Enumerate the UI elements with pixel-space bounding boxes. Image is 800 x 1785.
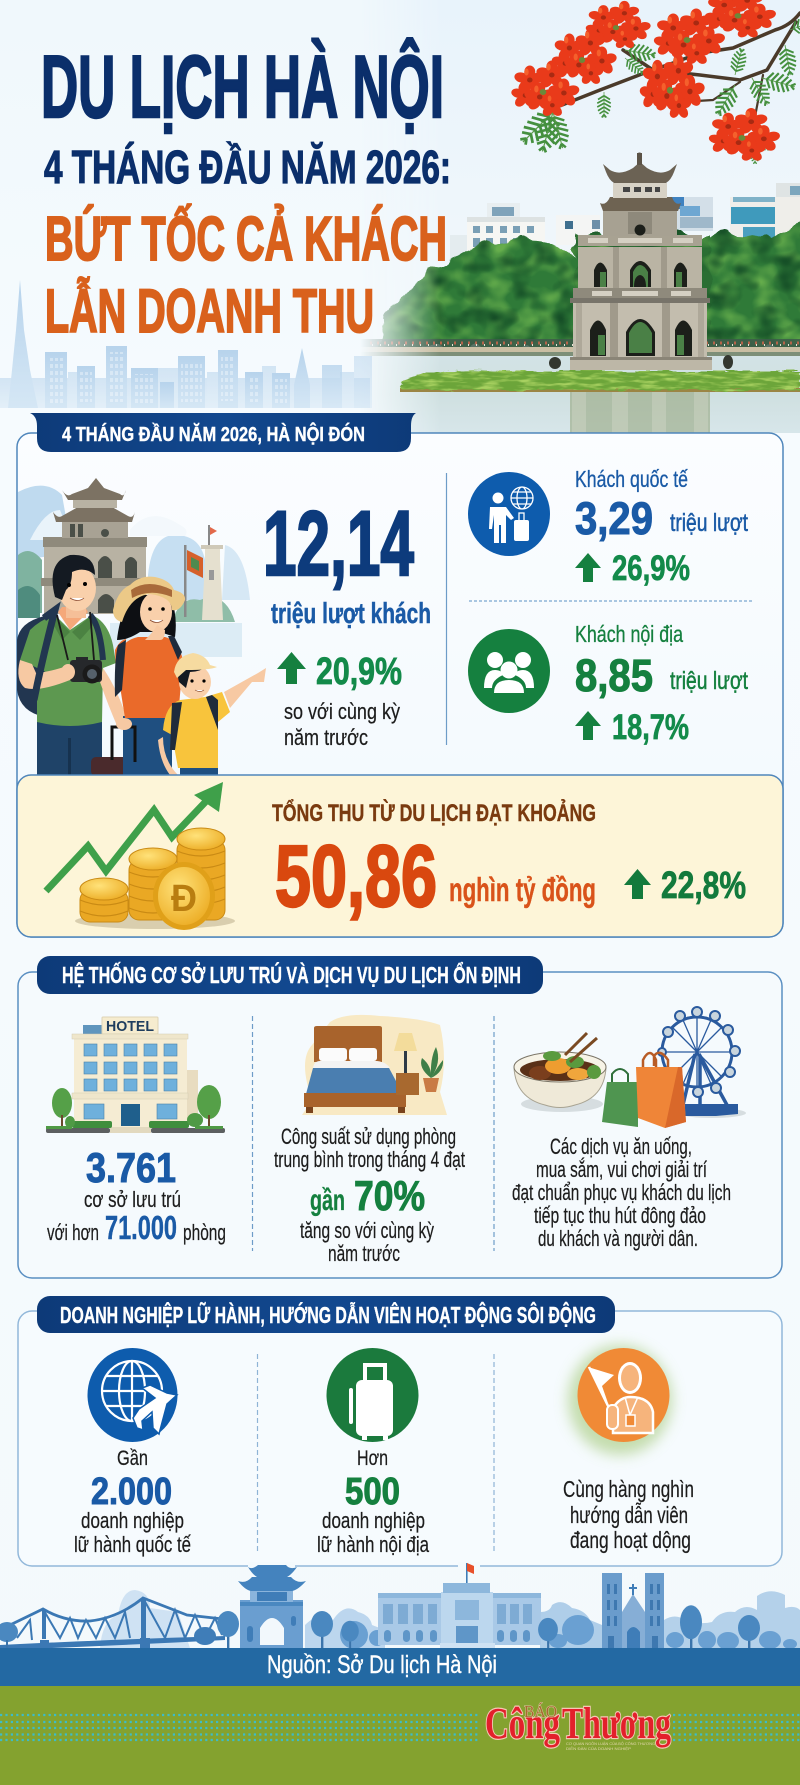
St Joseph cathedral xyxy=(602,1573,664,1648)
Hanoi gate xyxy=(238,1565,306,1648)
lake shore xyxy=(360,339,800,357)
suitcase xyxy=(91,757,154,776)
stat: room occupancy: Công suất sử dụng phòng xyxy=(281,1124,456,1149)
panel: visitors xyxy=(17,433,783,937)
distant tree silhouettes xyxy=(100,1590,800,1650)
panel: tourism revenue xyxy=(17,775,783,937)
Presidential palace xyxy=(378,1563,541,1648)
revenue figure: nghìn tỷ đồng xyxy=(449,871,596,908)
revenue figure: 50,86 xyxy=(275,828,437,925)
logo: Báo Công Thương: Thương xyxy=(562,1699,671,1748)
stat: room occupancy: trung bình trong tháng 4 đạt xyxy=(274,1147,465,1172)
text: services: mua sắm, vui chơi giải trí xyxy=(536,1157,707,1182)
stat: international tour companies: 2.000 xyxy=(91,1471,172,1513)
main number 12,14 million: triệu lượt khách xyxy=(271,598,431,630)
growth 20,9%: so với cùng kỳ xyxy=(284,699,400,724)
left city skyline xyxy=(0,280,372,408)
stat: room occupancy: tăng so với cùng kỳ xyxy=(300,1218,434,1243)
stat: room occupancy: gần xyxy=(310,1184,345,1217)
icon: hotel xyxy=(46,1017,225,1133)
stat: tour guides: Cùng hàng nghìn xyxy=(563,1476,694,1502)
backpack of man xyxy=(17,615,55,717)
stat: international tour companies xyxy=(74,1348,191,1557)
icon: globe and plane xyxy=(88,1348,178,1442)
revenue growth: 22,8% xyxy=(661,865,746,907)
stat: room occupancy: năm trước xyxy=(328,1241,400,1266)
bottom skyline of Hanoi landmarks xyxy=(0,1562,800,1653)
illustration: family of tourists at Hanoi landmarks xyxy=(17,478,266,776)
Long Bien bridge xyxy=(0,1598,239,1650)
title line 4: LẪN DOANH THU xyxy=(45,277,374,345)
icon: suitcase xyxy=(326,1348,418,1442)
title xyxy=(41,37,451,345)
icon: traveller with globe xyxy=(468,472,550,556)
icon: bed xyxy=(302,1015,447,1115)
section heading 2: HỆ THỐNG CƠ SỞ LƯU TRÚ VÀ DỊCH VỤ DU LỊCH ỔN ĐỊNH xyxy=(62,960,521,988)
title line 2: 4 THÁNG ĐẦU NĂM 2026: xyxy=(44,141,451,193)
section heading 1: 4 THÁNG ĐẦU NĂM 2026, HÀ NỘI ĐÓN xyxy=(62,422,365,446)
source bar xyxy=(0,1648,800,1686)
stat: domestic tour companies: lữ hành nội địa xyxy=(317,1532,430,1557)
icon: tour guide xyxy=(578,1348,670,1442)
stat: international tour companies: doanh nghiệp xyxy=(81,1508,184,1533)
stat: domestic tour companies: doanh nghiệp xyxy=(322,1508,425,1533)
logo: Báo Công Thương: BÁO xyxy=(524,1702,557,1721)
stat: tour guides: đang hoạt dộng xyxy=(570,1527,691,1553)
growth 20,9%: 20,9% xyxy=(316,651,402,693)
icon: group of people xyxy=(468,629,550,713)
stat: tour guides: hướng dẫn viên xyxy=(570,1502,688,1528)
reflection of the tower xyxy=(570,392,710,433)
stat: room occupancy: 70% xyxy=(354,1172,425,1219)
icon: hotel: HOTEL xyxy=(106,1018,154,1035)
revenue figure xyxy=(275,828,596,925)
main number 12,14 million: 12,14 xyxy=(263,493,414,595)
stat: domestic tour companies: Hơn xyxy=(357,1447,388,1470)
revenue growth xyxy=(624,865,746,907)
source bar: Nguồn: Sở Du lịch Hà Nội xyxy=(267,1651,497,1679)
stat: domestic tour companies xyxy=(317,1348,430,1557)
background buildings xyxy=(450,183,800,262)
stat: international tour companies: lữ hành quốc tế xyxy=(74,1532,191,1557)
logo: Báo Công Thương xyxy=(485,1699,671,1751)
domestic visitors xyxy=(468,621,748,747)
stat: tour guides xyxy=(563,1345,694,1553)
text: services xyxy=(512,1134,731,1251)
title line 1: DU LỊCH HÀ NỘI xyxy=(41,37,444,136)
trees xyxy=(378,218,800,348)
domestic visitors: Khách nội địa xyxy=(575,621,683,647)
section heading 2 xyxy=(37,956,543,994)
trees row xyxy=(311,1605,760,1653)
stat: international tour companies: Gần xyxy=(117,1447,148,1470)
international visitors: 3,29 xyxy=(575,493,653,544)
logo: Báo Công Thương: DIỄN ĐÀN CỦA DOANH NGHIỆP xyxy=(566,1746,631,1751)
icon: rising chart and coins: Đ xyxy=(171,878,197,920)
international visitors: 26,9% xyxy=(612,549,690,588)
logo: Báo Công Thương: Công xyxy=(485,1699,560,1748)
footer band xyxy=(0,1686,800,1785)
child xyxy=(180,766,218,776)
international visitors xyxy=(468,466,748,588)
stat: accommodation: cơ sở lưu trú xyxy=(84,1187,181,1212)
domestic visitors: 8,85 xyxy=(575,650,653,701)
growth 20,9% xyxy=(277,651,402,750)
revenue heading: TỔNG THU TỪ DU LỊCH ĐẠT KHOẢNG xyxy=(272,798,596,827)
text: services: Các dịch vụ ăn uống, xyxy=(550,1134,692,1159)
stat: room occupancy xyxy=(274,1124,465,1266)
domestic visitors: 18,7% xyxy=(612,708,689,747)
title line 3: BỨT TỐC CẢ KHÁCH xyxy=(45,205,447,274)
panel: accommodation and services xyxy=(18,956,782,1278)
text: services: du khách và người dân. xyxy=(538,1226,698,1251)
international visitors: Khách quốc tế xyxy=(575,466,688,492)
stat: accommodation: với hơn xyxy=(47,1220,99,1245)
domestic visitors: triệu lượt xyxy=(670,667,748,695)
Turtle Tower xyxy=(549,152,733,370)
stat: accommodation xyxy=(47,1144,226,1246)
section heading 3 xyxy=(37,1296,615,1333)
island xyxy=(400,370,800,392)
woman xyxy=(123,716,172,775)
logo: Báo Công Thương: CƠ QUAN NGÔN LUẬN CỦA BỘ CÔNG THƯƠNG xyxy=(566,1741,655,1746)
icon: food, shopping, ferris wheel xyxy=(514,1007,746,1128)
stat: domestic tour companies: 500 xyxy=(345,1471,400,1513)
icon: rising chart and coins xyxy=(46,782,235,930)
main number 12,14 million xyxy=(263,493,431,630)
stat: accommodation: 71.000 xyxy=(105,1209,177,1246)
section heading 1 xyxy=(30,413,416,452)
text: services: tiếp tục thu hút đông đảo xyxy=(534,1203,706,1228)
flamboyant tree branch with red flowers xyxy=(510,0,800,164)
panel: travel companies and guides xyxy=(18,1296,782,1566)
international visitors: triệu lượt xyxy=(670,509,748,537)
stat: accommodation: phòng xyxy=(183,1220,226,1245)
growth 20,9%: năm trước xyxy=(284,725,368,750)
stat: accommodation: 3.761 xyxy=(86,1144,176,1191)
header scene: sky, buildings, trees and lake xyxy=(364,183,800,433)
